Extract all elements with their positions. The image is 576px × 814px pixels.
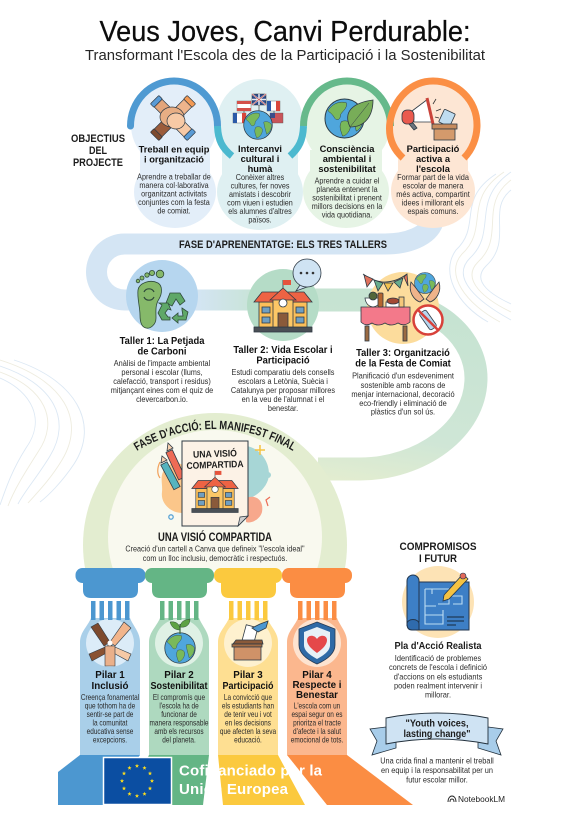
objectives label xyxy=(71,133,125,169)
pillar 1 text: que tothom ha de xyxy=(85,701,135,711)
workshop 3 text: menjar internacional, decoració xyxy=(351,390,455,399)
panel: commitments xyxy=(370,541,503,785)
workshop 2 text: escolars a Letònia, Suècia i xyxy=(238,377,328,386)
icon: speech bubble xyxy=(293,259,321,291)
pillar 2 title: Pilar 2 xyxy=(164,670,194,681)
pillar 3 title: Pilar 3 xyxy=(233,670,263,681)
co-funding text: Cofinanciado por la xyxy=(179,762,323,780)
icon: hands in a circle xyxy=(89,622,131,666)
pillar 1 text: sentir-se part de xyxy=(87,709,133,719)
objective 2 text: els alumnes d'altres xyxy=(228,207,292,216)
plan text: d'accions on els estudiants xyxy=(394,672,482,682)
icon: earth with leaf xyxy=(325,99,373,138)
workshop 1 text: mitjançant eines com el quiz de xyxy=(111,386,213,395)
closing text: Una crida final a mantenir el treball xyxy=(380,756,494,766)
pillar 4 text xyxy=(291,701,343,745)
panel: objectives xyxy=(130,79,477,230)
closing text xyxy=(380,756,494,785)
objective 4 text: espais comuns. xyxy=(407,207,459,216)
objective 3 text xyxy=(312,144,383,220)
workshop 2 text: Catalunya per proposar millores xyxy=(231,386,335,395)
pillar 1 text: la comunitat xyxy=(93,718,127,728)
pillar 2 text: amb els recursos xyxy=(154,726,204,736)
icon: school xyxy=(254,280,312,332)
pillar 3 text: que afecten la seva xyxy=(220,726,277,736)
icon: ballot box xyxy=(232,621,268,660)
subtitle: Transformant l'Escola des de la Participació i la Sostenibilitat xyxy=(85,47,486,64)
objective 4 text: escolar de manera xyxy=(403,181,464,191)
workshop 2 text xyxy=(231,368,335,413)
banner xyxy=(370,713,503,755)
pillar 3 text xyxy=(220,692,277,745)
path ribbon: blue to green transition xyxy=(195,290,265,310)
objective 1 text: Treball en equip xyxy=(139,144,210,155)
objective 3 text: sostenibilitat xyxy=(318,164,376,174)
objective 4 text: idees i millorant els xyxy=(402,198,464,208)
connector arcs xyxy=(130,81,477,158)
path ribbon: green xyxy=(264,300,476,469)
workshop 2 text: en la veu de l'alumnat i el xyxy=(242,395,325,404)
workshop 3 text xyxy=(351,371,455,417)
panel: pillar 4 xyxy=(282,568,352,755)
objective 1 text: i organització xyxy=(144,154,204,165)
icon: shield with heart xyxy=(299,622,335,664)
objective 4 text: Participació xyxy=(407,144,460,154)
co-funding text xyxy=(179,762,323,798)
workshop 1 title: de Carboni xyxy=(138,346,187,358)
pillar 1 text xyxy=(81,692,139,745)
objective 4 text: activa a xyxy=(416,154,451,164)
plan text xyxy=(389,654,487,700)
workshop 1 text: personal i escolar (llums, xyxy=(121,368,203,377)
objective 1 text: organitzant activitats xyxy=(141,189,207,199)
pillar 1 title: Pilar 1 xyxy=(95,670,125,681)
workshop 2 title: Taller 2: Vida Escolar i xyxy=(233,345,333,356)
pillar 3 text: els estudiants han xyxy=(222,701,274,711)
workshop 2 title: Participació xyxy=(256,355,310,367)
objective 3 text: sostenibilitat i prenent xyxy=(312,193,383,203)
banner text: lasting change" xyxy=(404,729,471,740)
objectives label: DEL xyxy=(89,145,107,157)
icon: hands holding globe xyxy=(410,273,440,302)
workshop 3 text: sostenible amb racons de xyxy=(361,381,445,390)
workshop 3 text: eco-friendly i eliminació de xyxy=(359,399,447,408)
plan text: poden realment intervenir i xyxy=(394,681,482,691)
pillar 4 text: prioritza el tracte xyxy=(293,718,341,728)
closing text: futur escolar millor. xyxy=(406,775,468,785)
heading: action phase (curved): FASE D'ACCIÓ: EL MANIFEST FINAL xyxy=(133,420,294,451)
path ribbon: blue xyxy=(97,222,433,300)
objectives label: OBJECTIUS xyxy=(71,133,125,145)
co-funding text: Unión Europea xyxy=(179,781,289,798)
objective 4 text: l'escola xyxy=(416,164,451,174)
workshop 2 text: benestar. xyxy=(268,404,298,413)
pillar 2 text: l'escola ha de xyxy=(159,701,199,711)
pillar bases xyxy=(58,755,413,805)
vision text xyxy=(125,544,305,563)
objective 3 text: planeta entenent la xyxy=(316,185,378,194)
pillar 2 text: manera responsable xyxy=(149,718,209,728)
workshop 1 title xyxy=(120,336,205,358)
objective 3 text: vida quotidiana. xyxy=(322,210,372,220)
NotebookLM mark: NotebookLM xyxy=(458,795,505,804)
objective 2 text: països. xyxy=(248,215,272,225)
pillar 3 text: La convicció que xyxy=(224,692,272,702)
icon: joined hands xyxy=(150,95,196,141)
pillar 1 text: Creença fonamental xyxy=(81,692,139,702)
vision text: Creació d'un cartell a Canva que defineix "l'escola ideal" xyxy=(125,544,305,554)
pillar 3 text: en les decisions xyxy=(225,718,271,728)
illustration: poster xyxy=(158,441,271,526)
pillar 4 text: L'escola com un xyxy=(294,701,340,711)
workshop 1 text: calefacció, transport i residus) xyxy=(113,377,211,386)
panel: action phase circle xyxy=(83,413,347,570)
pillar 1 text: excepcions. xyxy=(93,735,127,745)
decorative blobs xyxy=(158,445,271,523)
objective 2 text: com viuen i estudien xyxy=(227,198,293,208)
pillar 2 text xyxy=(149,692,209,745)
panel: objective 1 backdrop xyxy=(131,82,217,228)
icon: school on poster xyxy=(192,471,238,512)
plan title: Pla d'Acció Realista xyxy=(394,640,482,652)
panel: objective 4 backdrop xyxy=(390,82,476,228)
panel: pillar 3 xyxy=(214,568,282,755)
plan text: millorar. xyxy=(425,690,451,700)
objective 1 text: conjuntes com la festa xyxy=(138,198,211,207)
panel: objective 3 backdrop xyxy=(303,82,390,228)
pillar 3 text: educació. xyxy=(234,735,262,745)
icon: recycling arrows xyxy=(158,293,188,323)
poster text xyxy=(186,447,244,472)
plan text: concrets de l'escola i definició xyxy=(389,663,487,672)
icon: globe with flags xyxy=(233,94,283,139)
objective 2 text: amistats i descobrir xyxy=(229,190,291,199)
icon: pencils xyxy=(161,443,185,490)
pillar 1 text: educativa sense xyxy=(87,726,133,736)
objective 4 text: Formar part de la vida xyxy=(397,173,470,182)
pillar 4 text: d'afecte i la salut xyxy=(293,726,341,736)
pillar 2 text: del planeta. xyxy=(162,735,196,745)
panel: pillar 1 xyxy=(76,568,146,755)
pillar 4 title: Benestar xyxy=(296,690,338,701)
objective 2 text: Conèixer altres xyxy=(236,173,284,182)
objective 2 text: cultures, fer noves xyxy=(231,181,290,191)
pillar 4 title: Respecte i xyxy=(292,680,342,691)
poster text: COMPARTIDA xyxy=(186,459,244,472)
icon: blueprint and pencil xyxy=(402,566,474,638)
objective 4 text xyxy=(396,144,471,216)
workshop 1 text: clevercarbon.io. xyxy=(136,395,188,404)
objective 1 text: manera col·laborativa xyxy=(139,181,209,190)
workshop 3 text: plàstics d'un sol ús. xyxy=(371,407,435,417)
objective 1 text: Aprendre a treballar de xyxy=(137,172,211,182)
plan text: Identificació de problemes xyxy=(395,654,481,663)
poster text: UNA VISIÓ xyxy=(193,447,237,461)
objective 2 text xyxy=(227,144,293,225)
pillar 1 title xyxy=(91,670,129,692)
closing text: en equip i la responsabilitat per un xyxy=(381,766,493,775)
pillar 4 text: emocional de tots. xyxy=(291,735,343,745)
pillar 4 text: espai segur on es xyxy=(291,709,343,719)
icon: table with food xyxy=(361,292,410,341)
pillar 1 title: Inclusió xyxy=(91,681,129,692)
banner text: "Youth voices, xyxy=(406,718,469,730)
commitments heading: I FUTUR xyxy=(419,553,457,565)
objective 1 text xyxy=(137,144,211,216)
pillar 4 title: Pilar 4 xyxy=(302,670,332,681)
objective 2 text: cultural i xyxy=(241,154,279,164)
workshop 2 title xyxy=(233,345,333,367)
objective 3 text: Consciència xyxy=(320,144,375,154)
objective 3 text: millors decisions en la xyxy=(312,202,383,211)
vision text: com un lloc inclusiu, democràtic i respectuós. xyxy=(143,554,287,563)
icon: no plastic bottle xyxy=(414,306,442,334)
workshop 2 text: Estudi comparatiu dels consells xyxy=(232,368,335,377)
vision title: UNA VISIÓ COMPARTIDA xyxy=(158,531,272,544)
pillar 3 title xyxy=(222,670,274,692)
pillar 2 title xyxy=(150,670,208,692)
decorative waves xyxy=(0,172,511,506)
workshop 1 title: Taller 1: La Petjada xyxy=(120,336,205,347)
commitments heading xyxy=(400,541,476,565)
objectives label: PROJECTE xyxy=(73,157,123,169)
EU flag xyxy=(104,758,172,804)
objective 1 text: de comiat. xyxy=(157,206,191,216)
pillar 2 text: El compromís que xyxy=(153,692,205,702)
heading: learning phase: FASE D'APRENENTATGE: ELS TRES TALLERS xyxy=(179,239,387,251)
workshop 1 text: Anàlisi de l'impacte ambiental xyxy=(114,359,211,368)
objective 3 text: Aprendre a cuidar el xyxy=(315,176,380,186)
panel: objective 2 backdrop xyxy=(217,79,303,230)
icon: green footprint xyxy=(136,270,164,328)
pillar 2 text: funcionar de xyxy=(161,709,197,719)
banner text xyxy=(404,718,471,740)
pillar 3 text: de tenir veu i vot xyxy=(224,709,272,719)
workshop 1 text xyxy=(111,359,213,404)
objective 2 text: Intercanvi xyxy=(238,144,282,154)
objective 3 text: ambiental i xyxy=(323,154,371,164)
panel: workshop 1 xyxy=(111,260,213,404)
icon: bunting xyxy=(363,274,408,291)
panel: workshop 3 xyxy=(351,272,455,417)
icon: earth with sprout xyxy=(165,619,195,663)
icon: megaphone and ballot box xyxy=(402,98,457,140)
pillar 3 title: Participació xyxy=(222,681,274,692)
pillar 2 title: Sostenibilitat xyxy=(150,681,208,692)
commitments heading: COMPROMISOS xyxy=(400,541,476,553)
workshop 3 title xyxy=(355,348,451,370)
workshop 3 title: de la Festa de Comiat xyxy=(355,358,451,370)
pillar 4 title xyxy=(292,670,342,701)
objective 4 text: més activa, compartint xyxy=(396,190,471,199)
workshop 3 text: Planificació d'un esdeveniment xyxy=(352,371,455,381)
panel: pillar 2 xyxy=(145,568,214,755)
workshop 3 title: Taller 3: Organització xyxy=(356,348,450,359)
title: Veus Joves, Canvi Perdurable: xyxy=(100,16,470,48)
panel: workshop 2 xyxy=(231,259,335,413)
objective 2 text: humà xyxy=(248,164,273,174)
